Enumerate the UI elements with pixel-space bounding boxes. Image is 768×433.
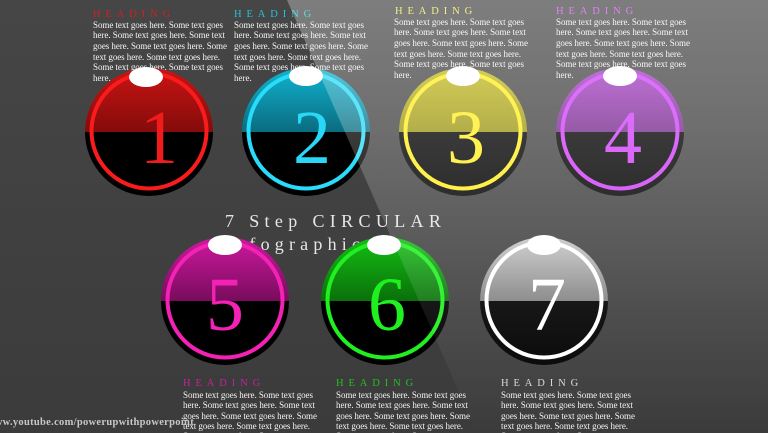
heading 1: HEADING [93,9,175,20]
body text 5: goes here. Some text goes here. Some [183,411,317,421]
body text 3: here. [394,70,412,80]
circle 1 [85,67,213,196]
circle 2: 2 [293,96,331,180]
body text 4: here. [556,70,574,80]
body text 7: goes here. Some text goes here. Some [501,411,635,421]
body text 6: goes here. Some text goes here. Some [336,411,470,421]
body text 6: text goes here. Some text goes here. [336,421,463,431]
body text 7: Some text goes here. Some text goes [501,390,631,400]
panel: step 3 [394,6,528,196]
panel: step 2 [234,9,370,196]
body text 1: goes here. Some text goes here. Some [93,41,227,51]
body text 4: Some text goes here. Some text goes [556,59,686,69]
body text 5: Some text goes here. Some text goes [183,390,313,400]
body text 3: Some text goes here. Some text goes [394,17,524,27]
title: 7 Step CIRCULAR [225,211,446,231]
body text 5: text goes here. Some text goes here. [183,421,310,431]
heading 2: HEADING [234,9,316,20]
circle 6: 6 [368,263,406,347]
body text 3: here. Some text goes here. Some text [394,27,526,37]
panel: step 4 [556,6,690,196]
body text 4: text goes here. Some text goes here. [556,49,683,59]
circle 4: 4 [604,96,642,180]
circle 5 [161,235,289,365]
circle 3: 3 [447,96,485,180]
heading 5: HEADING [183,378,265,389]
circle 6 [321,235,449,365]
circle 7 [480,235,608,365]
heading 7: HEADING [501,378,583,389]
body text 5 [183,390,317,433]
panel: step 6 [321,235,470,433]
circle 7: 7 [528,263,566,347]
heading 6: HEADING [336,378,418,389]
body text 1: here. Some text goes here. Some text [93,30,225,40]
circle 4 [556,66,684,196]
circle 5: 5 [206,263,244,347]
body text 7: here. Some text goes here. Some text [501,400,633,410]
circle 3 [399,66,527,196]
circle 2 [242,66,370,196]
body text 1: text goes here. Some text goes here. [93,52,220,62]
diagonal sheen overlay [287,0,768,433]
heading 3: HEADING [395,6,477,17]
body text 2: Some text goes here. Some text goes [234,62,364,72]
body text 6 [336,390,470,433]
body text 2 [234,20,368,83]
body text 3: goes here. Some text goes here. Some [394,38,528,48]
body text 3: Some text goes here. Some text goes [394,59,524,69]
body text 2: Some text goes here. Some text goes [234,20,364,30]
body text 2: here. Some text goes here. Some text [234,30,366,40]
panel: step 7 [480,235,635,433]
body text 2: text goes here. Some text goes here. [234,52,361,62]
circle 1: 1 [140,96,178,180]
body text 6: Some text goes here. Some text goes [336,390,466,400]
body text 4: goes here. Some text goes here. Some [556,38,690,48]
title [224,211,446,254]
body text 3: text goes here. Some text goes here. [394,49,521,59]
heading 4: HEADING [556,6,638,17]
body text 2: goes here. Some text goes here. Some [234,41,368,51]
title: Infographic [224,234,365,254]
body text 5: here. Some text goes here. Some text [183,400,315,410]
body text 1: here. [93,73,111,83]
body text 7: text goes here. Some text goes here. [501,421,628,431]
body text 1: Some text goes here. Some text goes [93,20,223,30]
body text 2: here. [234,73,252,83]
body text 7 [501,390,635,433]
body text 3 [394,17,528,80]
body text 6: here. Some text goes here. Some text [336,400,468,410]
body text 4 [556,17,690,80]
body text 4: here. Some text goes here. Some text [556,27,688,37]
body text 1 [93,20,227,83]
body text 4: Some text goes here. Some text goes [556,17,686,27]
panel: step 1 [85,9,227,196]
panel: step 5 [161,235,317,433]
body text 1: Some text goes here. Some text goes [93,62,223,72]
